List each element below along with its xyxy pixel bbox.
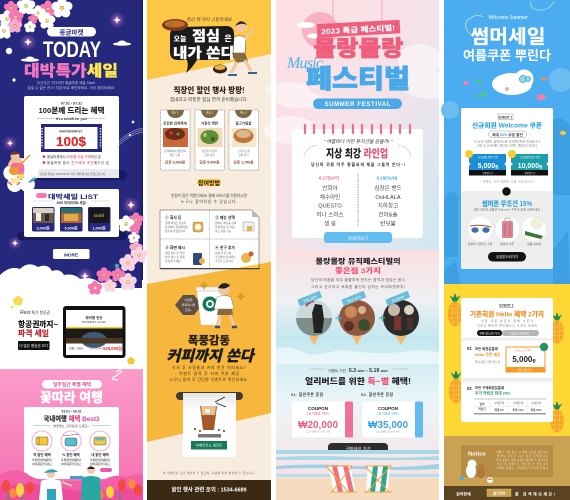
card: lineup: 지상 최강 라인업 [326,146,388,160]
table: rates: 적립금 [478,407,486,411]
title: 대박특가세일: 대박특가 세일 [24,62,118,80]
card: list: SNS 하이라이트 세일! [57,200,86,205]
card: best3: 국내 벚꽃 여행 상품 특가 [32,458,53,462]
table: rates: 구매금액 [531,401,541,405]
step 1 [165,215,203,233]
card: 100 benefit: ※ 당첨자 발표는 2023.08.01 이후 개별 통지로 안내드립니다. [36,172,106,176]
lineup: sunday [374,176,402,228]
bubble lines [465,1,554,35]
text: 참여방법 [171,193,248,204]
lineup: sunday: 심장은 밴드 [374,184,402,192]
card: best3: 국내여행 혜택 Best3 [44,414,100,423]
step 3: 완료해 주세요 [165,259,181,263]
card: lineup: 당신의 귀를 아주 황홀하게 채울 그들이 온다~! [311,161,405,167]
menu card 3: 메뉴 3 [240,110,248,114]
table: rates: 최대 10% [512,408,524,412]
step 4: 이용 후 친구를 [215,251,232,255]
tag: 3 [385,291,410,306]
tablet mockup: 1,200,000 [89,346,103,350]
pill: 특별 혜택: 일주일간 특별 혜택 [53,381,91,388]
coupon: 20,000: 1일 이용권 구매시 [307,410,330,416]
heading: early bird: 얼리버드를 위한 특~별 혜택! [305,376,411,386]
notice list: · 발행된 쿠폰은 기간 이후 소멸됩니다 [494,454,549,458]
coupon: hello: HELLO 쿠폰 [515,348,531,352]
character: man traveller [70,466,101,500]
store name pill [47,27,96,36]
button: 자세히: 자세히보기 [348,235,368,242]
subheading: 힘내라고 따뜻한 점심 한끼 준비했습니다. [170,96,248,103]
tablet mockup: 인천 - 파리 [69,346,83,350]
step 2: 결제 완료 후 이용 [215,225,235,229]
coupon: 35,000: COUPON [378,406,399,411]
step 2: 원하는 메뉴를 선택 [215,221,237,225]
step 3: 화면 제시 후 결제 [165,255,185,259]
button: purchase: 구매하러 가기 [345,445,371,452]
text: flight sale: Rest 특가 항공권 [20,310,50,316]
photo: market [383,300,419,345]
heading: 폭풍감동: 폭풍감동 [188,333,230,347]
card: event 1: 신규회원 Welcome 쿠폰 [472,120,542,130]
notice list: · 일부 상품은 쿠폰 사용이 제한될 수 있습니다 [494,458,549,462]
card: event 1: 캐리어 쿠폰 [500,242,514,246]
tag: 2 [341,291,366,306]
button: 자세히 [324,232,392,243]
card: 100 benefit: 100분께 드리는 혜택 [38,105,105,115]
panel: summer sale [441,0,570,500]
panel: 점심 event [147,0,271,500]
coupon: 10,000: 신규회원 전용 쿠폰 [520,155,541,159]
text: coffee: 이벤트 참여 후 커피 쿠폰 제공 [179,371,240,376]
button: 항공권 [18,341,50,350]
heading: 3 benefits [316,256,400,275]
benefit 2: 모든 구매회원분들께 [475,385,504,390]
text: coffee [170,365,248,382]
benefit 1: Hello 쿠폰 제공 [475,352,501,357]
step 4: 추가하면 커피까지 [215,255,236,259]
card: event 2: 적립금 혜택을 준비했으니 놓치지 마세요 [477,324,537,328]
coupon: 5,000: 쿠폰받기 > [482,171,494,175]
menu card 2: 정갈한 가정식 [202,149,218,153]
coupon: 20,000 [292,402,353,438]
product: plate [522,217,546,241]
notice title: Notice [468,452,486,458]
benefit 2: 02 [467,386,472,391]
lineup: saturday: 6.17(SAT) [319,176,339,180]
flowers: cloud edge [88,246,147,294]
tablet mockup: 파리행 항공 [85,315,103,320]
step 3: ③ 화면 제시 [165,245,185,250]
menu card 2: 단돈 5,000원 [200,160,220,164]
sparkles [200,281,245,301]
tag: 1: 가득 음악 [302,294,318,304]
text: tagline: 점심 뭐 먹지 고민하세요 [186,17,232,22]
step 4: 쿠폰을 드립니다 [215,259,234,263]
coupon: 35,000: 2일 이용권 구매시 [377,410,400,416]
card: best3: 국내 벚꽃 여행 상품 특가 [90,458,111,462]
lineup: sunday: 반딧불 [380,220,396,228]
notice list: · 이벤트 기간 종료 시 적용 가능성 있습니다 [494,450,549,454]
product: item 2: 5,000원 [64,226,78,230]
intro text: 놓칠 수 없는 찬스! 지금 바로 확인하세요. 어서 참여하세요! [28,85,115,90]
character: woman traveller [39,469,72,500]
menu card 3: 덮밥 정식 [238,153,249,157]
card: best3: 역 할인 혜택 [33,452,51,457]
decorative clouds [6,40,131,82]
button: 항공권: 더 많은 항공권 보기 [19,343,48,348]
title: 썸머세일: 썸머세일 [470,26,546,48]
step 2 [215,215,254,233]
benefit 2: 추가 적립금 최대 20% [475,390,511,396]
hexagon bubble: 커피마시러 [182,302,196,307]
badge: 2023: 2023 특급 페스티벌! [321,22,395,36]
divider: columns [357,174,359,226]
product: item 3: 1,000원 [92,226,106,230]
card: best3: 내 할인 혜택 [91,452,109,457]
coupon: 10,000 [508,150,549,176]
step 1: ① 회사 등 [165,215,182,220]
card: lineup [292,125,423,238]
flowers: top left blossoms [0,0,73,39]
step 3 [165,245,205,265]
text: benefit intro [311,277,405,289]
coupon: 10,000: 쿠폰받기 > [524,171,536,175]
card: event 1: 여름 피서템 [527,242,541,246]
button: coupon: 쿠폰받으러가기 [496,254,518,259]
benefit 2 [467,385,511,396]
music notes [118,121,143,146]
character: man bowing [214,283,237,327]
card: 100 benefit: 몽글마켓 앱사 친구에게 추천해주신 분 [47,160,109,165]
footer: search [444,486,570,500]
pill: SUMMER FESTIVAL [313,98,402,109]
heading: 3 benefits: 좋은점 3가지 [335,266,381,275]
benefit 1: 01 [467,346,472,351]
footer: contact [147,480,271,500]
card: event 2: EVENT 2 [499,304,514,308]
lineup: sunday: 지하창고 [378,202,398,210]
card: list: 대박세일 LIST [48,193,98,201]
character: pointing man [228,21,257,75]
icon: bus [90,431,110,451]
coupon: hello: 쿠폰 다운로드 [517,368,533,372]
coupon: 10,000: 10,000원 [518,163,542,170]
iced coffee [200,406,217,430]
period text [310,368,408,374]
footer: contact: 할인 행사 관련 문의 : 1534-6689 [172,486,246,494]
panel: music festival [264,0,458,500]
text: benefit intro: 당신의 마음을 아주 황홀하게 만드는 음악과 맛있는 음식 [311,277,405,282]
speech bubble: 점심 [192,28,220,44]
product: item 3 [88,207,110,232]
table: rates: 실버 [480,402,485,406]
button: MORE [53,249,90,259]
pill: 특별 혜택 [42,380,102,388]
yellow section [147,262,271,442]
icon: air ticket [32,431,52,451]
table: rates: 구매금액 [513,401,523,405]
menu card 1: 든든한 김치찌개 [163,120,187,126]
photo: music [296,300,332,345]
icon: coffee cup [196,287,225,325]
title: 여름쿠폰: 여름쿠폰 뿌린다 [463,48,551,63]
button: MORE: MORE [64,252,78,257]
lineup: sunday: 6.18(SUN) [377,176,398,180]
notice list: · 쿠폰 및 이벤트는 변경될 수 있습니다 [494,462,549,466]
card: event 1: 첫 신규 이벤트 참여만으로 마이페이지로 발급합니다 [474,138,540,144]
coupon: 20,000: COUPON [308,406,329,411]
pineapples [448,293,564,433]
table: rates: 구매금액 [494,401,504,405]
title: 페스티벌: 페스티벌 [306,64,410,94]
panel: 꽃따라 여행 [0,369,143,500]
step 3: 매장 방문 후 직원 [165,251,185,255]
coupon: 5,000: 5,000원 [478,163,498,170]
step 2: 바로 사용 가능 [215,229,232,233]
tag: 1 [297,291,322,306]
lineup: saturday: 미나 스미스 [316,210,344,218]
lineup: saturday: 안희아 [322,184,338,192]
text: flight sale [18,310,58,338]
tablet mockup [63,306,126,358]
fish [462,78,566,135]
lineup: saturday: QUESTO [318,204,342,210]
intro text: 두근두근 기다리던 몽글마켓 세일 Start! [37,80,95,85]
card: event 1: 썸머 필요한 상품을 Welcome 쿠폰과 함께 사용하세요 [474,208,540,212]
speech bubble [162,19,235,74]
card: 100 benefit: It's a benefit for you! [56,117,87,121]
text: benefit intro: 그리고 신기하고 독특한 물건이 넘치는 프리마켓까지! [311,284,405,289]
label: coupon 02: 02. 할인쿠폰 증정 [361,392,394,397]
flowers: right side [118,212,144,254]
photo: food [339,300,375,345]
benefit 1: 모든 회원분들께 [475,346,498,351]
card: event 2: 쿠폰 받으러 가기 [479,330,500,335]
lineup: saturday: 채수아민 [320,193,340,201]
text: coffee: 누구나 참여 후 간단한 이벤트로 확인하세요. [170,377,248,382]
menu card 1: 김치찌개와 계란말이 [164,149,187,153]
step 1: 문의하여 참여하세요 [165,225,189,229]
card: event 1 [461,108,553,269]
box: four steps [160,210,259,269]
tablet mockup: BUSINESS CLASS [82,320,106,324]
menu card 2: 가정식 백반 [201,120,219,126]
hexagon bubble [175,295,202,315]
heading: 커피까지 쏜다: 커피까지 쏜다 [166,348,256,365]
title: 몰랑몰랑: 몰랑몰랑 [314,36,404,61]
icon: cable car [61,431,81,451]
script: welcome summer: Welcome Summer [488,15,529,21]
menu card 2: 한상 차림 [204,153,215,157]
period text: 이벤트 기간 : 5.3 WED - 5.19 WED [328,368,389,374]
card: best3: 국내 벚꽃 여행 상품 특가 [60,458,82,462]
sea and sand [276,450,439,500]
characters: bears [460,460,493,483]
pill: SUMMER FESTIVAL: SUMMER FESTIVAL [324,102,391,108]
coupon: 35,000: ₩35,000 [368,420,408,431]
coupon: hello [506,343,548,372]
coupon: 35,000: 1회 이벤트만 사용 가능 [376,430,401,434]
coupon: 5,000 [465,150,507,176]
title: 꽃따라 여행: 꽃따라 여행 [40,390,103,405]
card: event 2: 적립금 확인하기 [511,331,530,335]
hexagon bubble: 나만은 [184,297,193,302]
card: event 1: 최대 20% 쿠폰 할인 [492,132,524,137]
menu card 3: 단돈 1,790원 [234,160,254,164]
card: event 1: EVENT 1 [499,115,513,119]
character: polar bear swimmer [473,70,534,98]
card: best3: 벚꽃명소, 교자만감! 드세요~! [53,423,90,428]
menu card 3: 고기가 듬뿍 [237,149,250,153]
card: list [17,189,127,240]
title: TODAY: TODAY [43,37,101,62]
card: event 1: 썸머존 무조건 15% [482,199,533,208]
speech bubble: 내가 쏜다 [173,45,235,61]
menu card 3 [229,110,258,170]
menu card 1 [160,110,190,170]
card: 100 benefit [24,96,127,180]
store name pill: 몽글마켓 [60,27,83,36]
menu card 1: 메뉴 1 [172,110,179,114]
wave [276,347,439,364]
text: flight sale: 파격 세일 [18,328,49,338]
card: event 1: 신규 및 신규회원 가입 즉시 쿠폰, 적립이 드립니다 [477,142,537,148]
card: event 2: 기존 회원 분들을 위해 쿠폰과 [481,319,533,323]
sparkle: yellow [11,296,135,364]
menu card 3: 돌고기덮밥 [235,120,252,126]
roller [176,392,243,400]
tablet mockup: 529,000원 [103,345,122,351]
lineup: sunday: 진아&솔 [378,210,398,218]
card: 100 benefit: 07.01 - 07.31 [61,102,82,106]
product: item 3: Gold [94,213,104,218]
notice list: · 자세한 내용은 고객센터로 문의해 주세요 [494,466,549,470]
heading: 3 benefits: 몰랑몰랑 뮤직페스티벌의 [316,256,400,266]
footer: search: 검색창에 [456,490,471,496]
coupon: 5,000: 신규회원 전용 쿠폰 [478,155,499,159]
sun and clouds [264,12,458,144]
heading: 참여방법: 참여방법 [198,180,220,188]
card: lineup: " 여름바다 어떤 뮤지션을 담을까! " [324,139,393,145]
notice list [494,450,549,470]
lineup: saturday: 생 길 [324,220,336,228]
lineup: saturday [316,176,344,228]
coupon: 20,000: ₩20,000 [298,420,338,431]
step 4: ④ 친구 추가 [215,245,235,250]
product: sunglasses [468,217,492,241]
beach chair 2 [364,466,392,493]
coupon: 100$: MANGMARKET [59,130,83,134]
footnote: 본 이벤트는 조기 마감될 수 있으며, 사정에 따라 변경될 수 있습니다. [163,471,255,475]
section: notice [444,436,570,486]
menu card 2 [195,110,224,170]
coupon: 20,000: 1회 이벤트만 사용 가능 [306,430,331,434]
card: event 2: 기존회원 Hello 혜택 2가지 [470,310,544,318]
card: best3: 상세 내용은 안내 참고 [61,462,81,466]
step 1: 결제 서비스 담당자 [165,221,187,225]
card: 100 benefit: 몽글마켓에서 10만원 이상 구매하신 분 [47,154,101,159]
table: rates [474,399,546,414]
tag: 3: 프리마켓 [391,294,406,304]
card: best3: 상세 내용은 안내 참고 [90,462,110,466]
text: 참여방법: 인원이 많은 직원이세요! 결제 서비스를 이용하시면 [171,193,248,198]
benefit 1 [467,346,501,364]
coupon: 100$ [41,124,102,152]
button: purchase [328,443,388,454]
label: coupon 01: 01. 할인쿠폰 증정 [291,392,324,397]
heading: 참여방법 [197,179,221,188]
step 1: 접수를 완료합니다 [165,229,186,233]
product: suitcase [496,217,520,241]
card: event 1: 멋쟁이 선글라스 쿠폰 [468,242,493,246]
step 4 [215,245,254,263]
coupon: coffee [183,393,236,457]
speech bubble: 오늘 [174,34,187,43]
footer: search: 를 검색해보세요! [515,490,555,496]
lineup: sunday: OoHLALA [375,195,401,201]
text: flight sale: 항공권까지~ [18,319,58,329]
product: item 1: 3,000원 [36,226,50,230]
coupon: coffee: 아메리카노 대전트 [196,442,223,448]
coral background [441,68,570,285]
table: rates: 최대 20% [530,408,542,412]
script: Music: Music [286,55,323,72]
menu card 2: 메뉴 2 [206,110,214,114]
text: coffee: 식사 후 사람들과 커피 한잔 어떠세요? [172,365,246,370]
section: event 2 yellow [444,284,570,436]
badge: 2023 [317,20,400,38]
card: best3 [24,407,119,479]
card: best3: 상세 내용은 안내 참고 [32,462,52,466]
text: 참여방법: 누구나 참여하실 수 있습니다. [181,199,237,204]
coupon: 100$: 100$ [56,134,87,149]
beach chair 1 [326,466,357,493]
button: coupon [488,252,526,262]
speech bubble: 은 [224,34,232,43]
tag: 2: 맛난 음식 [346,294,362,304]
badge: black dot [502,187,511,196]
card: best3: 03.01 - 03.31 [62,410,82,414]
clouds divider [0,264,152,300]
sparkles [7,16,135,280]
character: girl with guitar on flower [3,151,39,192]
intro text [28,80,115,90]
heading: 직장인 할인: 직장인 할인 행사 팡팡! [174,85,244,95]
benefit 1: 앱사 회원 가입 하신 분 [475,360,501,364]
table: rates: 최대 5% [494,408,504,412]
hexagon bubble: 간다~ [185,307,192,312]
pink hills and tulips [0,470,143,500]
card: event 1: * 이벤트 기간 내에만 사용 가능합니다. [480,180,534,184]
footer: search: 몰디버5 [493,491,505,496]
menu card 1: 단돈 3,000원 [165,160,186,164]
card: event 2 [461,298,553,422]
step 2: ② 메뉴 선택 [215,215,235,220]
coupon: hello: 5,000원 [512,355,536,364]
card: best3: % 할인 혜택 [62,452,80,457]
coupon: 35,000 [362,402,423,438]
menu card 1: 세트 구성 [170,153,181,157]
